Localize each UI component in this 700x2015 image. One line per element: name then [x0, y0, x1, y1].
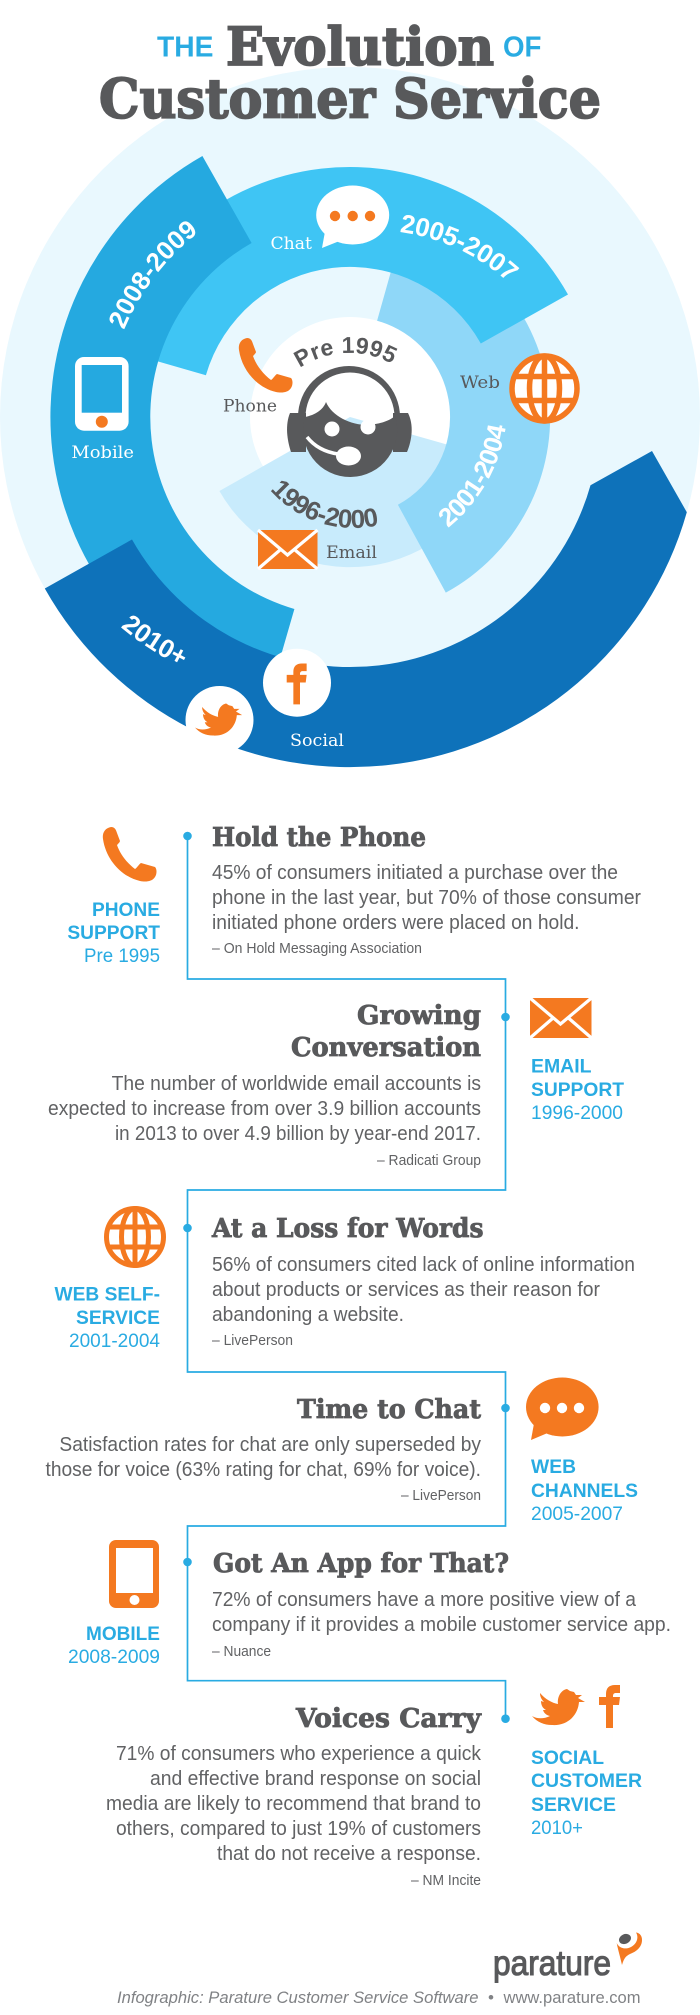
body text: expected to increase from over 3.9 billion accounts [48, 1097, 481, 1120]
title: OF [503, 32, 542, 64]
category label: 2001-2004 [69, 1330, 160, 1352]
timeline connector line [183, 832, 510, 1723]
icon: chat bubble [316, 186, 389, 248]
date label: 2008-2009: 2008-2009 [110, 221, 196, 330]
body text: phone in the last year, but 70% of those consumer [212, 886, 641, 909]
source: – Radicati Group [377, 1152, 481, 1169]
title [99, 17, 601, 131]
category label [531, 1056, 624, 1124]
heading [291, 1001, 481, 1063]
body text: 45% of consumers initiated a purchase over the [212, 861, 618, 884]
body text: Satisfaction rates for chat are only superseded by [59, 1433, 482, 1456]
heading: Got An App for That? [213, 1549, 509, 1579]
source: – NM Incite [411, 1872, 481, 1889]
label: Web: Web [460, 373, 500, 393]
category label [531, 1747, 642, 1839]
ring segment: web 2001-2004 [377, 224, 550, 593]
icon: smartphone [109, 1540, 159, 1608]
source: – LivePerson [401, 1487, 481, 1504]
body text: 72% of consumers have a more positive view of a [212, 1588, 637, 1611]
panel: web channels [46, 1378, 638, 1525]
heading: Growing [357, 1001, 481, 1031]
body text: 56% of consumers cited lack of online information [212, 1253, 635, 1276]
category label [67, 899, 160, 967]
icon: twitter badge [186, 686, 254, 754]
label: Email: Email [326, 543, 377, 563]
ring segment: social 2010+ [45, 451, 687, 767]
logo: parature [493, 1932, 642, 1983]
category label: SERVICE [76, 1307, 160, 1329]
heading: Voices Carry [295, 1704, 482, 1734]
title: Evolution [226, 17, 494, 78]
icon: facebook badge [263, 649, 331, 717]
category label: WEB SELF- [54, 1284, 160, 1306]
category label: EMAIL [531, 1056, 592, 1078]
panel: mobile [68, 1540, 671, 1668]
ring segment: mobile 2008-2009 [50, 156, 294, 705]
category label: 2008-2009 [68, 1646, 160, 1668]
date label: 1996-2000: 1996-2000 [271, 480, 377, 528]
body text: 71% of consumers who experience a quick [116, 1742, 482, 1765]
category label: SUPPORT [67, 922, 160, 944]
label: Social: Social [290, 731, 344, 751]
category label [531, 1456, 638, 1525]
category label: Pre 1995 [84, 945, 160, 967]
body text: that do not receive a response. [217, 1842, 481, 1865]
body text [212, 861, 641, 934]
category label: 1996-2000 [531, 1102, 623, 1124]
icon: twitter bird [532, 1689, 585, 1725]
body text [212, 1588, 671, 1636]
heading: Conversation [291, 1033, 481, 1063]
body text [46, 1433, 482, 1481]
footer credit: Infographic: Parature Customer Service Software [117, 1988, 478, 2007]
logo: parature: parature [493, 1944, 611, 1983]
body text: and effective brand response on social [150, 1767, 481, 1790]
label: Chat: Chat [270, 234, 312, 254]
category label [54, 1284, 160, 1352]
icon: globe [512, 356, 577, 421]
body text: media are likely to recommend that brand to [106, 1792, 481, 1815]
icon: globe [106, 1208, 164, 1266]
panel: phone support [67, 823, 641, 967]
footer credit: www.parature.com [503, 1988, 640, 2007]
source: – Nuance [212, 1643, 271, 1660]
icon: facebook f [599, 1685, 620, 1728]
icon: agent with headset [287, 366, 412, 477]
body text: in 2013 to over 4.9 billion by year-end 2017. [115, 1122, 481, 1145]
icon: envelope [530, 998, 592, 1038]
title: THE [157, 32, 213, 64]
category label: CUSTOMER [531, 1770, 642, 1792]
label: Mobile: Mobile [71, 443, 134, 463]
heading: Hold the Phone [212, 823, 426, 853]
footer credit: • [488, 1988, 494, 2007]
icon: phone [103, 827, 156, 882]
body text [48, 1072, 481, 1145]
category label: SOCIAL [531, 1747, 604, 1769]
body text: company if it provides a mobile customer service app. [212, 1613, 671, 1636]
body text [106, 1742, 482, 1865]
circular timeline diagram [0, 67, 700, 768]
panel: social customer service [106, 1685, 642, 1889]
heading: At a Loss for Words [211, 1214, 484, 1244]
body text: The number of worldwide email accounts is [112, 1072, 481, 1095]
panel: email support [48, 998, 624, 1169]
date label: Pre 1995: Pre 1995 [293, 337, 398, 367]
icon: phone [239, 338, 292, 393]
ring segment: chat 2005-2007 [110, 167, 568, 375]
date label: 2001-2004: 2001-2004 [439, 425, 506, 528]
category label: SERVICE [531, 1794, 616, 1816]
category label: CHANNELS [531, 1480, 638, 1502]
category label: MOBILE [86, 1623, 160, 1645]
body text: abandoning a website. [212, 1303, 404, 1326]
icon: mobile phone [75, 357, 129, 431]
body text: those for voice (63% rating for chat, 69% for voice). [46, 1458, 481, 1481]
icon: email envelope [258, 530, 318, 569]
date label: 2005-2007: 2005-2007 [400, 215, 520, 278]
category label: 2010+ [531, 1817, 583, 1839]
label: Phone: Phone [223, 396, 277, 416]
body text [212, 1253, 635, 1326]
body text: initiated phone orders were placed on hold. [212, 911, 580, 934]
category label: WEB [531, 1456, 576, 1478]
category label: 2005-2007 [531, 1503, 623, 1525]
ring segment: email 1996-2000 [219, 417, 494, 567]
category label: PHONE [92, 899, 160, 921]
body text: about products or services as their reason for [212, 1278, 600, 1301]
heading: Time to Chat [297, 1395, 481, 1425]
category label [68, 1623, 160, 1668]
panel: web self-service [54, 1208, 635, 1352]
title: Customer Service [99, 67, 601, 131]
date label: 2010+: 2010+ [121, 616, 186, 662]
source: – On Hold Messaging Association [212, 940, 422, 957]
category label: SUPPORT [531, 1079, 624, 1101]
source: – LivePerson [212, 1332, 293, 1349]
body text: others, compared to just 19% of customers [116, 1817, 481, 1840]
icon: chat bubble [526, 1378, 599, 1440]
